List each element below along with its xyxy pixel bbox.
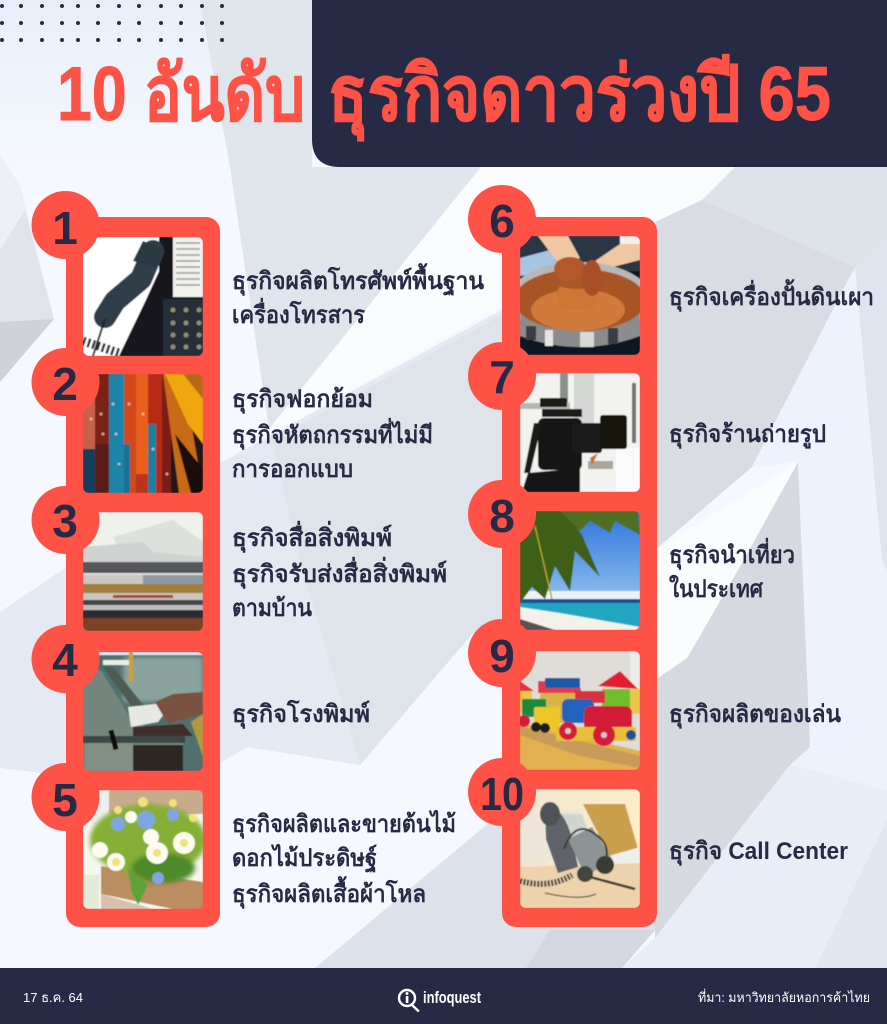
labels: right column: ธุรกิจนำเที่ยว [669,537,795,571]
labels: right column: ธุรกิจ Call Center [669,838,848,867]
labels: left column: ธุรกิจหัตถกรรมที่ไม่มี [232,417,433,451]
labels: left column: ธุรกิจรับส่งสื่อสิ่งพิมพ์ [232,556,447,590]
rank badges 6-10 [468,185,536,826]
date: 17 ธ.ค. 64 [23,990,83,1005]
dot pattern [0,4,224,42]
title [57,52,831,142]
rank badges 1-5 [32,191,100,831]
right frame [502,217,657,927]
rank badges 1-5: 1 [52,202,78,254]
rank badges 1-5: 3 [52,495,78,547]
panel: right column ranks 6-10 [468,185,657,927]
labels: left column: ธุรกิจโรงพิมพ์ [232,699,370,730]
rank badges 6-10: 9 [489,630,515,682]
labels: left column [232,262,485,910]
source: ที่มา: มหาวิทยาลัยหอการค้าไทย [698,989,870,1005]
footer bar [0,968,887,1024]
photo 5: flowers [83,790,206,909]
photo 8: tropical beach [520,511,640,630]
labels: left column: ธุรกิจฟอกย้อม [232,386,373,415]
labels: left column: ดอกไม้ประดิษฐ์ [232,843,377,874]
logo: infoquest [399,988,481,1012]
photo 2: dyed fabric [83,374,203,493]
photo 9: wooden toy train [518,651,640,770]
photo 3: newspapers [83,512,203,631]
rank badges 1-5: 5 [52,774,78,826]
rank badges 6-10: 8 [489,490,515,542]
labels: left column: ธุรกิจผลิตและขายต้นไม้ [232,809,456,840]
labels: right column: ในประเทศ [669,574,764,603]
logo: infoquest: infoquest [423,988,481,1007]
rank badges 6-10: 6 [489,195,515,247]
rank badges 1-5: 2 [52,358,78,410]
photo 10: office phone and headset [520,789,640,908]
photo 4: print cutting machine [83,652,203,771]
labels: left column: ตามบ้าน [232,595,313,622]
photo 1: telephone [83,237,203,356]
title: 10 อันดับ [57,52,305,137]
panel: left column ranks 1-5 [32,191,220,927]
labels: left column: ธุรกิจผลิตโทรศัพท์พื้นฐาน [232,262,485,297]
photo 7: camera [520,373,640,492]
labels: left column: ธุรกิจผลิตเสื้อผ้าโหล [232,875,426,910]
rank badges 6-10: 7 [489,351,515,403]
left frame [66,217,220,927]
photo 6: pottery wheel [520,236,640,355]
header panel [312,0,887,167]
rank badges 1-5: 4 [52,634,78,686]
labels: right column: ธุรกิจเครื่องปั้นดินเผา [669,278,874,313]
labels: left column: การออกแบบ [232,456,353,483]
rank badges 6-10: 10 [480,768,524,820]
labels: right column: ธุรกิจผลิตของเล่น [669,701,842,730]
labels: right column: ธุรกิจร้านถ่ายรูป [669,421,826,450]
labels: right column [669,278,874,867]
labels: left column: เครื่องโทรสาร [232,297,365,329]
labels: left column: ธุรกิจสื่อสิ่งพิมพ์ [232,520,392,554]
